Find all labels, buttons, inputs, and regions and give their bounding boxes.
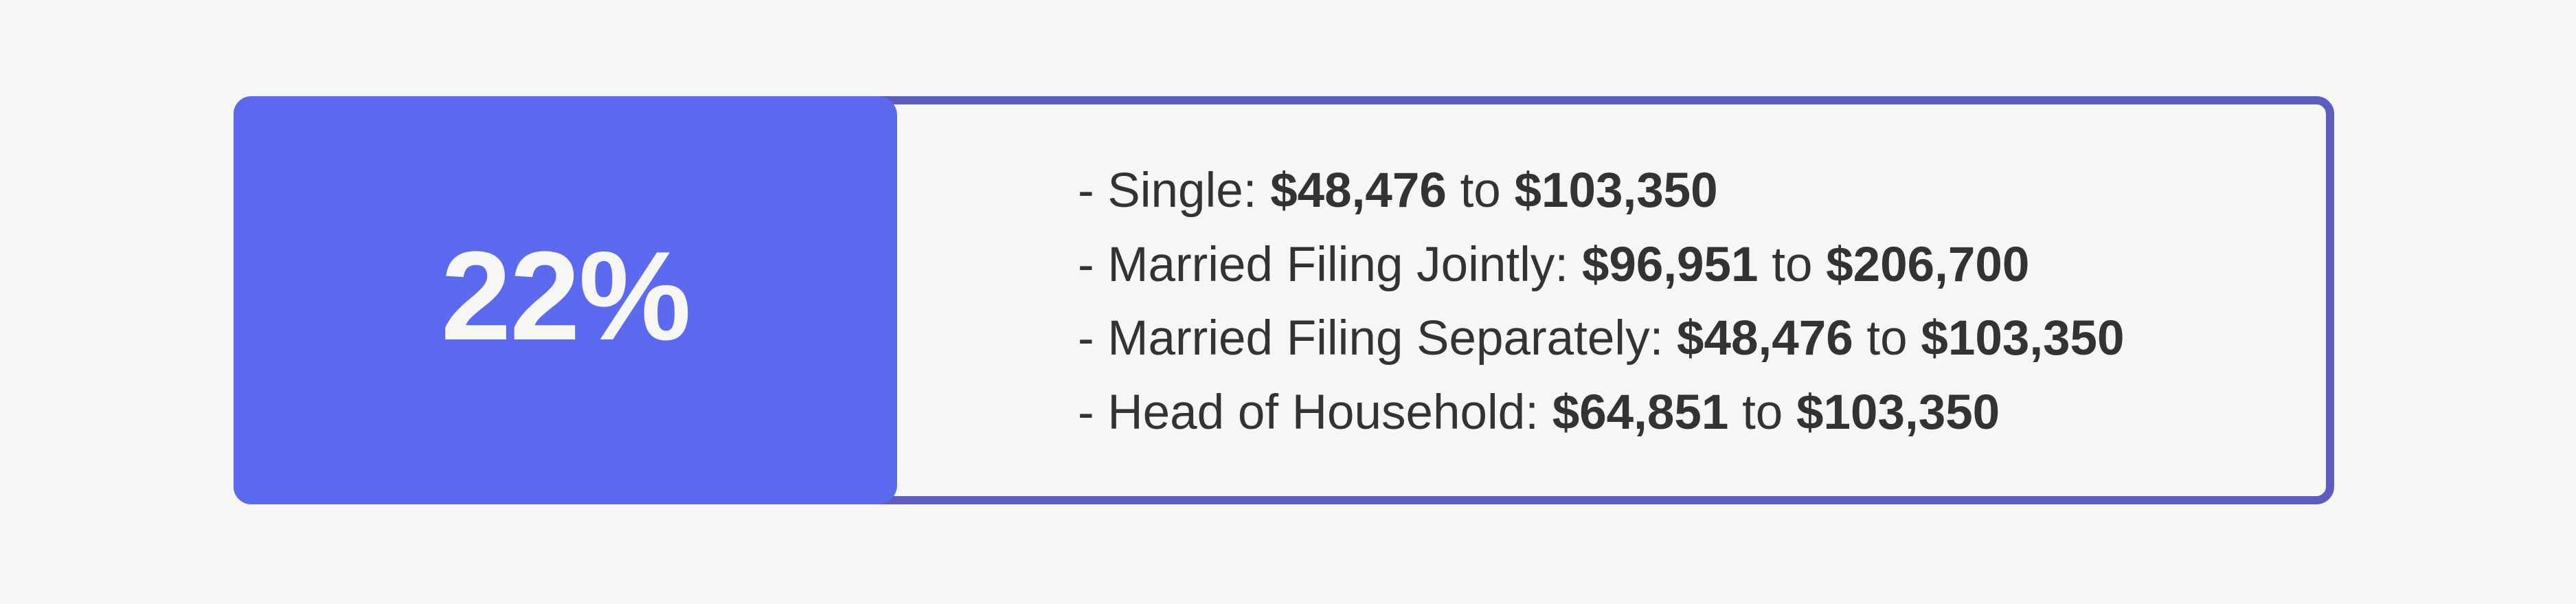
text block: bracket ranges xyxy=(1078,164,2125,440)
line: married separately: - Married Filing Separately: $48,476 to $103,350 xyxy=(1078,311,2125,366)
line: single: - Single: $48,476 to $103,350 xyxy=(1078,164,1718,218)
line: married jointly: - Married Filing Jointly: $96,951 to $206,700 xyxy=(1078,238,2029,292)
panel: rate box xyxy=(234,96,897,504)
rate heading: 22% xyxy=(441,225,690,366)
line: head of household: - Head of Household: $64,851 to $103,350 xyxy=(1078,385,2000,440)
card border panel xyxy=(234,96,2334,504)
